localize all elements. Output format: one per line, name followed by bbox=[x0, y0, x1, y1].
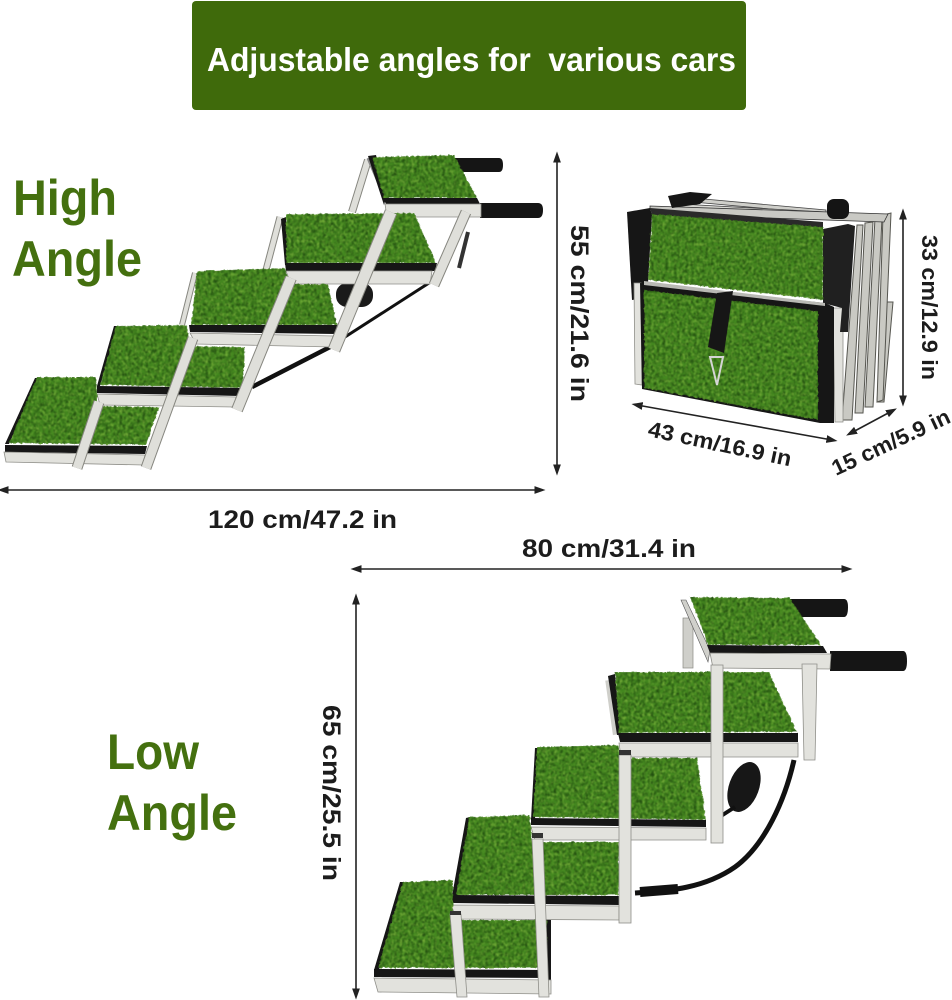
heading: low angle bbox=[107, 724, 237, 841]
left aluminium edge bbox=[634, 283, 642, 385]
dimension: 43 cm width: 43 cm/16.9 in bbox=[646, 416, 794, 471]
dimension: 120 cm length: 120 cm/47.2 in bbox=[208, 506, 397, 534]
dimension: 33 cm height: 33 cm/12.9 in bbox=[917, 235, 942, 380]
step 3 bbox=[189, 268, 337, 347]
heading: low angle: Low bbox=[107, 724, 199, 780]
step 1 bbox=[4, 377, 159, 465]
upper grass panel bbox=[648, 214, 823, 300]
high angle ramp photo bbox=[4, 155, 543, 468]
back supports bbox=[605, 600, 710, 735]
handles bbox=[790, 599, 907, 671]
step 2 bbox=[97, 325, 245, 407]
folding legs bbox=[450, 664, 817, 997]
folded ramp photo bbox=[627, 192, 893, 423]
dimension: 55 cm height: 55 cm/21.6 in bbox=[565, 225, 593, 402]
step 4 bbox=[608, 672, 798, 757]
top rods and straps bbox=[650, 192, 888, 222]
dimension: 43 cm width bbox=[637, 405, 832, 471]
step 1 bbox=[374, 880, 551, 994]
bag and strap bbox=[635, 757, 794, 893]
lower grass panel bbox=[644, 290, 818, 420]
side aluminium plates bbox=[833, 213, 893, 422]
dimension: 15 cm depth: 15 cm/5.9 in bbox=[828, 404, 952, 481]
heading: high angle: Angle bbox=[12, 231, 142, 287]
heading: low angle: Angle bbox=[107, 785, 237, 841]
step 5 bbox=[690, 597, 831, 669]
buckle strap and carabiner bbox=[708, 291, 733, 385]
heading: high angle bbox=[12, 170, 142, 287]
step 4 bbox=[281, 213, 437, 284]
step 3 bbox=[531, 745, 706, 840]
heading: high angle: High bbox=[13, 170, 117, 226]
handles bbox=[454, 158, 543, 218]
folding legs bbox=[77, 212, 466, 468]
dimension: 80 cm length: 80 cm/31.4 in bbox=[522, 535, 696, 563]
strap and bag bbox=[252, 232, 468, 387]
low angle ramp photo bbox=[374, 597, 907, 997]
title banner bbox=[192, 1, 746, 110]
step 5 bbox=[368, 155, 481, 217]
dimension: 65 cm height: 65 cm/25.5 in bbox=[317, 705, 345, 881]
title banner: Adjustable angles for various cars bbox=[207, 41, 736, 78]
upper black sides bbox=[627, 208, 855, 332]
step 2 bbox=[451, 815, 619, 920]
lower panel frame bbox=[640, 281, 834, 423]
back supports bbox=[182, 158, 386, 325]
